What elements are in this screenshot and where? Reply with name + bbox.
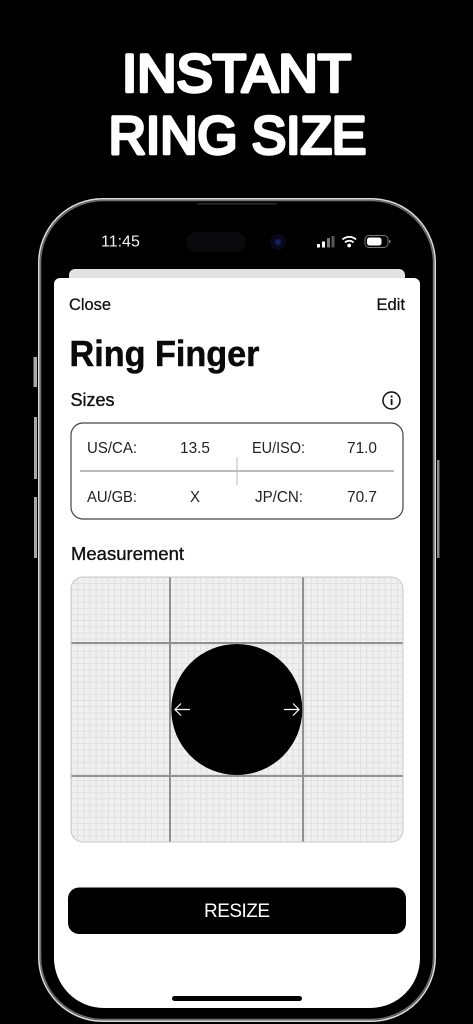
ring circle [171, 644, 302, 775]
resize button: RESIZE [204, 901, 270, 922]
size values: 13.5 [180, 440, 210, 457]
info icon [383, 392, 400, 409]
home indicator [172, 996, 302, 1001]
title: RING SIZE [109, 106, 366, 166]
size values: 71.0 [347, 440, 377, 457]
phone frame [34, 199, 440, 1021]
battery icon [365, 236, 390, 248]
resize button [68, 888, 406, 934]
measurement grid [71, 577, 403, 842]
back sheet [69, 269, 405, 285]
signal icon [317, 236, 334, 248]
title [109, 44, 366, 166]
size values: JP/CN: [255, 489, 303, 506]
size values: X [190, 489, 201, 506]
clock: 11:45 [101, 234, 140, 250]
heading: Ring Finger [70, 333, 260, 374]
right arrow [284, 704, 299, 716]
sizes label: Sizes [70, 390, 114, 410]
screen [54, 278, 420, 1008]
status bar [101, 232, 390, 252]
size values: US/CA: [87, 440, 137, 457]
size values [87, 440, 377, 506]
size values: EU/ISO: [252, 440, 305, 457]
wifi icon [342, 237, 356, 246]
camera [270, 234, 286, 250]
edit button: Edit [376, 296, 405, 314]
size values: AU/GB: [87, 489, 137, 506]
close button: Close [69, 296, 111, 314]
size values: 70.7 [347, 489, 377, 506]
dynamic island [186, 232, 246, 252]
sizes table [71, 423, 403, 519]
left arrow [175, 704, 190, 716]
measurement label: Measurement [71, 544, 184, 564]
title: INSTANT [122, 44, 351, 104]
